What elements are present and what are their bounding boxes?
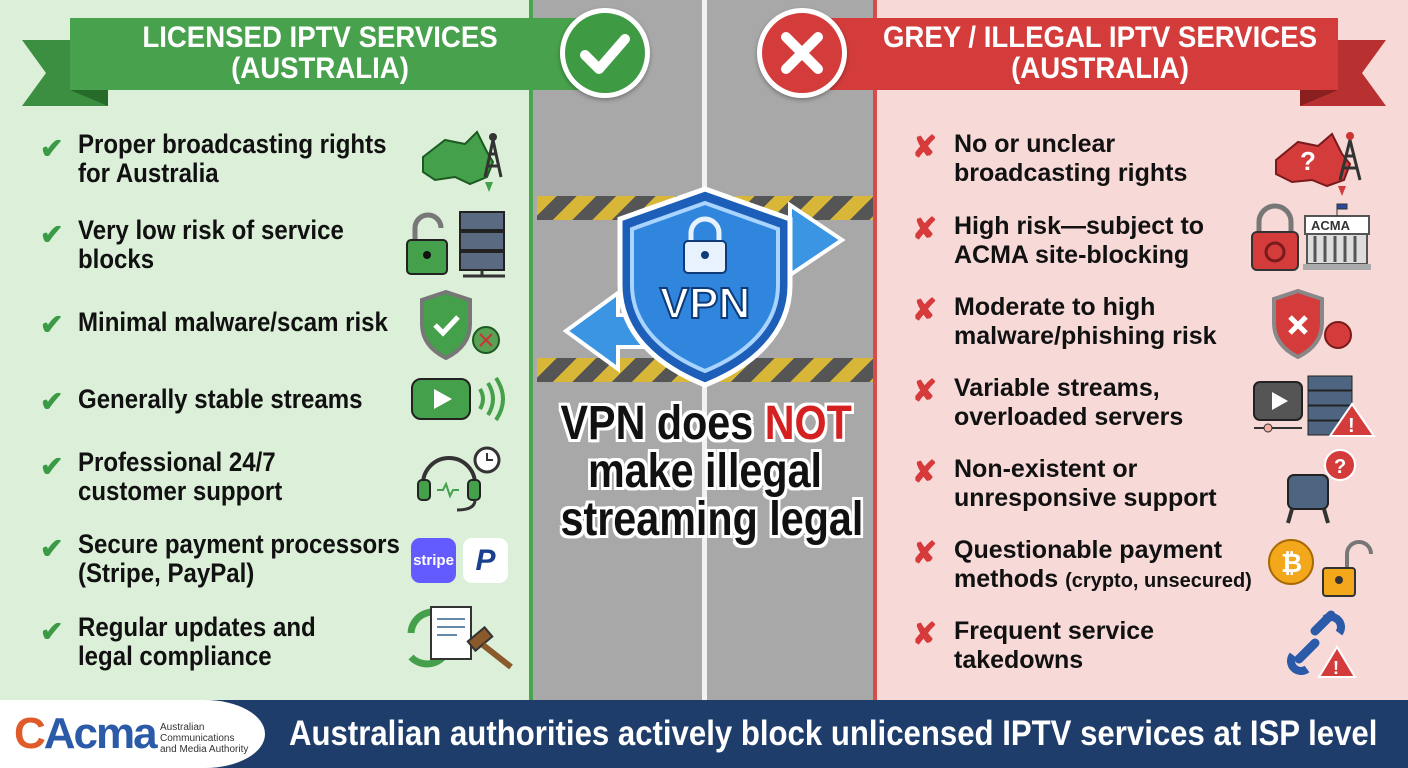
item 3: Moderate to high [954, 293, 1155, 321]
banner: licensed: LICENSED IPTV SERVICES [142, 21, 498, 54]
item 6: Secure payment processors [78, 529, 400, 559]
item 4: overloaded servers [954, 403, 1183, 431]
logo: ACMA: Communications [160, 733, 234, 744]
item 6: Questionable payment [954, 536, 1222, 564]
item 7: ✘ [912, 618, 937, 651]
item 4 [40, 376, 505, 422]
item 1: ? [1300, 146, 1316, 176]
item 1 [912, 130, 1362, 196]
item 6: ✔ [40, 533, 63, 564]
item 2 [912, 204, 1371, 271]
item 6: P [475, 544, 496, 577]
item 6 [912, 536, 1373, 597]
item 7: Frequent service [954, 617, 1154, 645]
list: illegal [912, 130, 1376, 678]
item 2: ACMA site-blocking [954, 241, 1189, 269]
callout: VPN does NOT make illegal streaming legal: VPN does NOT [561, 397, 852, 450]
item 4: ✘ [912, 375, 937, 408]
item 6 [40, 529, 508, 588]
item 3: ✔ [40, 309, 63, 340]
icon: VPN shield with arrows [562, 186, 846, 388]
item 7: ! [1333, 658, 1339, 678]
logo: ACMA [0, 700, 265, 768]
item 1: for Australia [78, 158, 219, 188]
list: licensed [40, 129, 513, 671]
item 7: takedowns [954, 646, 1083, 674]
item 7 [912, 610, 1356, 678]
item 4: ✔ [40, 386, 63, 417]
item 5: customer support [78, 476, 282, 506]
logo: ACMA: Australian [160, 722, 204, 733]
banner: licensed [22, 18, 580, 106]
item 3: malware/phishing risk [954, 322, 1217, 350]
item 3: ✘ [912, 294, 937, 327]
item 2: Very low risk of service [78, 215, 344, 245]
item 4 [912, 374, 1376, 437]
item 2: ACMA [1311, 218, 1351, 233]
item 5 [40, 446, 500, 512]
panel: illegal background [873, 0, 1408, 700]
item 7: ✔ [40, 616, 63, 647]
item 1: ✘ [912, 131, 937, 164]
item 4: Generally stable streams [78, 384, 363, 414]
item 6: stripe [413, 552, 454, 569]
banner: illegal: (AUSTRALIA) [1011, 52, 1189, 85]
item 7: legal compliance [78, 641, 272, 671]
item 6: ₿ [1281, 548, 1302, 578]
item 2: ✔ [40, 219, 63, 250]
item 3: Minimal malware/scam risk [78, 307, 388, 337]
banner: licensed: (AUSTRALIA) [231, 52, 409, 85]
item 2: High risk—subject to [954, 212, 1204, 240]
item 7: Regular updates and [78, 612, 316, 642]
item 5: ✔ [40, 451, 63, 482]
item 5 [912, 449, 1356, 524]
logo: ACMA: and Media Authority [160, 744, 248, 755]
panel: licensed background [0, 0, 533, 700]
item 3 [40, 290, 500, 360]
callout: VPN does NOT make illegal streaming legal [558, 397, 864, 548]
item 5: ? [1334, 456, 1346, 478]
item 2: ✘ [912, 213, 937, 246]
banner: illegal [830, 18, 1386, 106]
item 4: ! [1348, 415, 1355, 437]
item 3 [912, 289, 1352, 359]
logo: ACMA: CAcma [14, 709, 156, 758]
icon: VPN shield with arrows: VPN [660, 279, 750, 328]
item 2: blocks [78, 244, 154, 274]
item 6: methods (crypto, unsecured) [954, 565, 1252, 593]
item 1: No or unclear [954, 130, 1115, 158]
footer bar [0, 700, 1408, 768]
icon: x circle [757, 8, 847, 98]
item 1 [40, 129, 502, 192]
item 5: Non-existent or [954, 455, 1137, 483]
callout: VPN does NOT make illegal streaming legal: streaming legal [561, 493, 863, 546]
item 5: unresponsive support [954, 484, 1217, 512]
item 5: ✘ [912, 456, 937, 489]
item 1: Proper broadcasting rights [78, 129, 386, 159]
icon: check circle [560, 8, 650, 98]
item 2 [40, 211, 505, 278]
footer text: Australian authorities actively block unlicensed IPTV services at ISP level [289, 714, 1377, 753]
item 4: Variable streams, [954, 374, 1160, 402]
item 1: ✔ [40, 133, 63, 164]
item 7 [40, 606, 513, 671]
panel: road [537, 0, 873, 700]
item 5: Professional 24/7 [78, 447, 276, 477]
callout: VPN does NOT make illegal streaming legal: make illegal [588, 445, 822, 498]
item 1: broadcasting rights [954, 159, 1187, 187]
item 6: (Stripe, PayPal) [78, 558, 254, 588]
banner: illegal: GREY / ILLEGAL IPTV SERVICES [883, 21, 1317, 54]
item 6: ✘ [912, 537, 937, 570]
